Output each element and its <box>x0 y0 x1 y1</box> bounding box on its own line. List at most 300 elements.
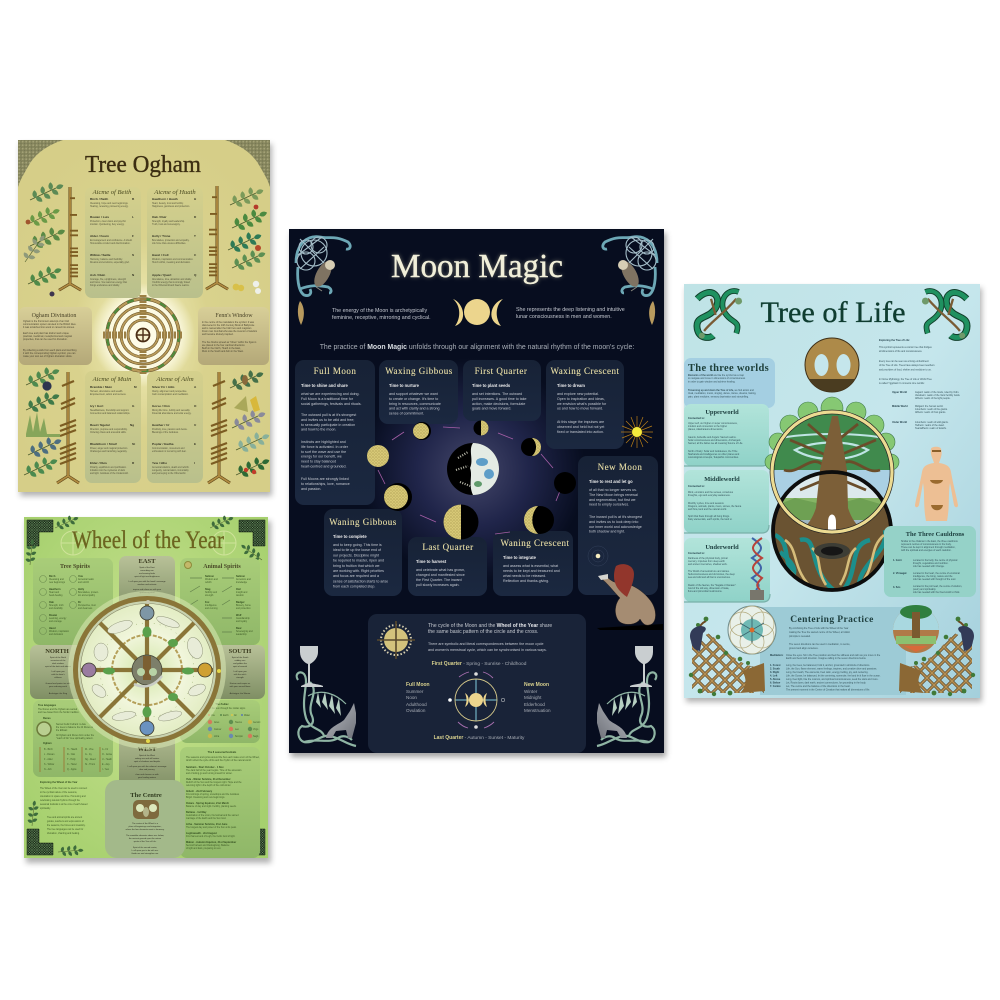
panel: Underworld: memory, impulses from deep earth <box>688 560 725 563</box>
panel: Underworld: and ancient memories, shadow work. <box>688 563 728 566</box>
panel: Animal Spirits: Ancestors and <box>236 578 251 581</box>
poster: Wheel of the Year <box>19 515 271 863</box>
lower disc roots <box>774 506 889 588</box>
panel: Last Quarter <box>408 537 487 596</box>
text: exploring Tree of Life: and providers of food, shelter and medicine to us. <box>879 368 932 371</box>
panel: Aicme of Huath: Boundaries, protection and empathy. <box>152 239 190 242</box>
panel: Waxing Gibbous: to create or change. It's time to <box>389 397 438 401</box>
icon: new moon star <box>588 546 608 566</box>
panel: The Zodiac: The cycle of the Sun through the zodiac signs <box>199 707 246 710</box>
icon: celtic tree and raven right <box>878 615 992 709</box>
label: new moon: Midnight <box>524 695 542 700</box>
panel: Last Quarter: Last Quarter <box>422 542 474 552</box>
text: intro left <box>332 308 431 321</box>
panel: Tree Languages: B - Birch <box>44 748 54 751</box>
panel: Underworld: Subconsciousness and old stories, the deep <box>688 573 735 576</box>
panel: Aicme of Huath: Apple / Quert <box>152 273 171 277</box>
panel: Waxing Gibbous: and support whatever we want <box>389 392 438 396</box>
panel: Fenn's Window: Beith in the North, Huath in the East, <box>202 347 241 350</box>
panel: Ogham Divination: By collecting a stick from each plant and inscribing <box>23 349 77 352</box>
panel: Centering Practice: 4. Left <box>770 674 778 678</box>
panel: Centering Practice: 7. Centre <box>770 685 781 688</box>
text: intro right: She represents the deep listening and intuitive <box>516 307 625 313</box>
panel: Tree Languages: and tree-based from the Nordic tradition. <box>38 711 80 714</box>
panel: Waning Gibbous: sense of satisfaction starts to arise <box>333 579 388 583</box>
title: Tree Ogham <box>85 152 201 178</box>
panel: Aicme of Muin: Power, anger and magical protection. <box>90 447 128 450</box>
panel: First Quarter: pull increases. A good time to take <box>472 397 527 401</box>
panel: New Moon: need to empty ourselves. <box>589 503 629 507</box>
panel: Aicme of Muin: M <box>134 385 137 389</box>
panel: The Centre <box>105 780 185 858</box>
panel: Tree Languages <box>33 700 113 777</box>
panel: 8 seasonal festivals: The dark half of the year begins. Time of the ancestors <box>186 769 242 772</box>
text: Exploring the Wheel of the Year: orientation in space and time. Honouring and <box>40 795 86 798</box>
panel: Aicme of Muin: Reed / Ngetal <box>90 423 110 427</box>
panel: Animal Spirits: leadership <box>236 633 247 636</box>
panel: Middleworld: Spirit that flows through all living things. <box>688 515 730 518</box>
panel: Tree Languages: Tree languages <box>38 704 57 707</box>
panel: Tree Spirits: Strength, truth <box>49 604 64 607</box>
panel: Tree Spirits: and durability <box>49 607 64 610</box>
text: Exploring the Wheel of the Year: guides, teachers and expressions of <box>47 820 84 823</box>
panel: Underworld: sea and wild and all that is unconscious. <box>688 576 731 579</box>
panel: 8 seasonal festivals: The longest day and power of the Sun at its peak. <box>186 826 237 829</box>
panel: North: dark wisdom <box>52 662 64 665</box>
waxing gibbous <box>413 422 431 440</box>
panel: Aicme of Beith: Protection, clear vision and psychic <box>90 220 127 223</box>
panel: South: Archetype: the Warrior <box>230 692 251 695</box>
panel: Tree Spirits: and courage <box>49 620 62 623</box>
panel: Aicme of Huath: T <box>194 234 196 238</box>
panel: South: with the oak's <box>234 673 246 676</box>
panel: Tree Spirits: Fir <box>78 601 81 604</box>
panel: Animal Spirits: Bravery, home <box>236 604 251 607</box>
panel: 8 seasonal festivals: Litha - Summer Solstice, 21st June <box>186 823 228 826</box>
panel: Animal Spirits: and protection <box>236 607 251 610</box>
panel: Animal Spirits: Badger <box>236 601 245 604</box>
panel: Aicme of Ailm: and journeying to the Otherworld. <box>152 472 186 475</box>
panel: Tree Languages: G - Ivy <box>85 754 93 756</box>
panel: The Three Cauldrons <box>884 526 976 597</box>
panel: 8 seasonal festivals: Samhain - Start October - 1 Nov <box>186 766 224 769</box>
panel: Waning Gibbous: Time to complete <box>333 534 367 539</box>
panel: Tree Languages: "reach of life" tree spirituality pattern. <box>56 737 94 740</box>
panel: 8 seasonal festivals: Mabon - Autumn Equinox, 21st September <box>186 841 236 844</box>
label: full moon: Noon <box>406 695 417 700</box>
panel: Aicme of Beith: Birch / Beith <box>90 197 108 201</box>
text: exploring Tree of Life: Under World <box>892 421 907 424</box>
chart: circle and cross <box>448 672 505 729</box>
panel: Tree Spirits: Heart and <box>49 591 60 594</box>
panel: Centering Practice <box>760 607 906 695</box>
panel: Waxing Crescent <box>546 360 624 449</box>
text: exploring Tree of Life: is called Yggdrasil. It connects nine worlds: <box>879 382 925 385</box>
panel: South: with your sacred flame <box>230 685 251 688</box>
panel: New Moon: our inner world and acknowledge <box>589 525 642 529</box>
icon: chalice and vines left <box>297 646 356 746</box>
corner owl and knot right <box>603 237 657 325</box>
panel: Tree Spirits: Perspective, trust <box>78 604 96 607</box>
title: Moon Magic <box>391 248 563 285</box>
panel: The Three Cauldrons: Life has needed with the fixed world to think. <box>913 591 960 594</box>
panel: moon and wheel correspondences: There are symbolic and literal correspondences between the moon cycle <box>428 642 543 646</box>
panel: First Quarter: action, make decisions, formulate <box>472 402 525 406</box>
gold ring <box>772 412 892 532</box>
panel: Centering Practice: principle is revealed. <box>789 635 811 638</box>
panel: Full Moon: energy for our benefit, we <box>301 455 342 459</box>
panel: Animal Spirits: wisdom <box>236 595 244 597</box>
panel: East: spirit of light and brightness <box>134 575 160 578</box>
panel: The Three Cauldrons: Life has needed with thought of the soul. <box>913 578 956 581</box>
panel: Ogham Divination: make your own set of Ogham divination sticks. <box>23 355 73 358</box>
panel: The Zodiac: Leo <box>235 729 240 731</box>
panel: Aicme of Ailm: A <box>194 385 197 389</box>
panel: West: setting sun and still waters <box>135 757 159 760</box>
panel: Aicme of Beith: Harmony, balance and flexibility. <box>90 258 123 261</box>
panel: Middleworld: Middleworld <box>704 476 740 483</box>
panel: Waning Crescent <box>493 531 573 596</box>
panel: The three worlds <box>684 358 775 408</box>
corner ornament left <box>18 140 63 187</box>
panel: Aicme of Ailm: Calm contemplation and meditation. <box>152 393 189 396</box>
panel: South: spirit of warmth <box>233 665 248 668</box>
panel: Animal Spirits: Wisdom and <box>205 579 218 581</box>
panel: Waning Gibbous: ideal to tie up the loose end of <box>333 548 381 552</box>
icon: dragon left <box>697 291 742 339</box>
panel: Aicme of Muin: Polarity, equilibrium and purification. <box>90 466 127 469</box>
panel: South: and golden fire <box>233 662 248 665</box>
label: full moon: Full Moon <box>406 682 430 688</box>
panel: Aicme of Huath: D <box>194 215 197 219</box>
panel: Animal Spirits: and cunning <box>205 608 218 610</box>
panel: Aicme of Beith: intuition. Quickening, fiery energy. <box>90 223 125 226</box>
panel: Full Moon: to surf the wave and use the <box>301 450 346 454</box>
panel: Tree Spirits: Holly <box>78 588 85 591</box>
panel: Upperworld: cosmological concepts, Telepathic communities. <box>688 456 739 459</box>
panel: The Three Cauldrons: intelligence, the living, nature and the <box>913 575 953 578</box>
panel: Aicme of Huath: H <box>194 197 197 201</box>
panel: Aicme of Ailm: Rising life force, fertility and sexuality. <box>152 409 191 412</box>
panel: West: WEST <box>138 746 157 753</box>
panel: Aicme of Huath: Happiness, goodness and protection. <box>152 205 190 208</box>
panel: East: awaken and activate <box>138 583 157 586</box>
icon: body with three cauldrons <box>915 447 958 521</box>
panel: Tree Languages: All Ogham and Runes form under the <box>56 734 95 737</box>
centre medallion <box>132 655 162 685</box>
text: Exploring the Wheel of the Year: divination, chanting and healing. <box>47 832 80 835</box>
panel: Full Moon: to relationships, love, romance <box>301 482 350 486</box>
panel: moon and wheel correspondences <box>368 614 586 753</box>
panel: Aicme of Huath: Strength, loyalty and leadership. <box>152 220 185 223</box>
panel: The Zodiac: Sagit. <box>253 735 259 738</box>
panel: moon and wheel correspondences: The cycle of the Moon and the Wheel of the Year share <box>428 623 552 629</box>
panel: Animal Spirits: Bear <box>236 627 242 630</box>
panel: Aicme of Beith: L <box>132 215 134 219</box>
panel: Tree Languages: D - Oak <box>67 754 76 756</box>
panel: Waning Gibbous: are working with. Right priorities <box>333 569 384 573</box>
panel: Animal Spirits: Animal Spirits <box>203 564 241 570</box>
panel: Aicme of Huath: Hazel / Coll <box>152 253 169 257</box>
panel: The three worlds: to navigate and move in dimensions of consciousness <box>688 377 746 380</box>
panel: The Three Cauldrons: with the spiritual and energies of each cauldron. <box>901 549 952 552</box>
panel: Waxing Crescent: and explore new potential. <box>557 392 599 396</box>
panel: The Three Cauldrons: thought, vegetables and nutrition. <box>913 562 949 565</box>
panel: Fenn's Window: and became divinely inspired. <box>202 333 234 336</box>
panel: Centering Practice: Long, Feel light, like the cosmos, and spiritual consciousness, seek the stars and more. <box>786 678 879 681</box>
panel: Tree Spirits: Hawthorn <box>49 588 61 591</box>
text: exploring Tree of Life: Asgard: realm of the Gods, ruled by Odin. <box>915 391 959 394</box>
icon: dragon right <box>922 291 967 339</box>
panel: The Three Cauldrons: Located in the belly, the centre of physical <box>913 559 958 562</box>
title: Tree of Life <box>760 296 906 329</box>
panel: Last Quarter: and celebrate what has grown, <box>416 568 465 572</box>
panel: Ogham Divination: Ogham Divination <box>32 313 76 319</box>
label: new moon: Winter <box>524 689 538 694</box>
panel: Aicme of Huath: Holly / Tinne <box>152 234 171 238</box>
panel: Tree Spirits: Hazel <box>49 627 56 630</box>
corner knots <box>19 515 265 862</box>
text: exploring Tree of Life: of the Tree of Life. Trees have always been teachers <box>879 364 935 367</box>
panel: 8 seasonal festivals: Celebration of the union, fire festival and the sacred <box>186 814 239 817</box>
earth centre <box>447 443 499 495</box>
panel: East <box>119 556 175 616</box>
panel: South: strength <box>236 676 245 679</box>
label: full moon: Ovulation <box>406 708 426 713</box>
panel: Tree Languages: M - Vine <box>85 749 94 751</box>
panel: Tree Languages: Q - Apple <box>67 768 77 771</box>
panel: Last Quarter: changed and manifested since <box>416 573 465 577</box>
last quarter <box>444 504 478 540</box>
panel: Waning Crescent: what needs to be released. <box>503 574 546 578</box>
icon: wolf right <box>597 703 627 738</box>
panel: The Centre: the ancient ground upon the nature <box>129 837 162 840</box>
panel: Tree Languages: I - Yew <box>102 769 109 771</box>
panel: The Three Cauldrons: 1. Goiri <box>893 559 902 562</box>
panel: Upperworld: Connected to: <box>688 417 705 420</box>
panel: Fenn's Window: and is named after the Irish hero and magician <box>202 327 252 330</box>
panel: West: Archetype: the Queen <box>137 783 158 786</box>
panel: Full Moon: need to stay balanced <box>301 460 336 464</box>
text: exploring Tree of Life: In Norse Mythology, the Tree of Life or World Tree <box>879 378 932 381</box>
icon: celtic tree and raven left <box>672 615 786 709</box>
panel: Centering Practice: making the Tree the sacred centre of the Wheel, a holistic <box>789 631 851 634</box>
panel: The Zodiac: Earth <box>223 714 229 717</box>
panel: Centering Practice: Life, the Ocean, be balanced, let the centering, surrender, feel and let it flow in the ocean. <box>786 674 881 678</box>
panel: Tree Languages: O - Gorse <box>102 753 113 756</box>
panel: Ogham Divination: practical, medicinal, metaphorical and magical <box>23 335 72 338</box>
panel: East: quickening wind <box>140 592 155 594</box>
label: new moon <box>524 682 551 713</box>
panel: Underworld: Realm of the faeries, the "Sagala or Danaan". <box>688 584 737 587</box>
panel: Ogham Divination: properties, that can be used for divination. <box>23 338 68 341</box>
panel: Animal Spirits: Insight and <box>236 591 248 594</box>
panel: Aicme of Ailm: E <box>194 442 196 446</box>
panel: Tree Languages: A - Fir <box>102 748 108 751</box>
text: Exploring the Wheel of the Year: Exploring the Wheel of the Year <box>40 781 77 784</box>
panel: Centering Practice: The present moment in the Centre of Creation that makes all dimensions of life. <box>786 688 870 692</box>
text: exploring Tree of Life: Jotunheim: realm of wild giants. <box>915 421 949 424</box>
chart: tree of life and roots <box>765 397 899 595</box>
panel: Aicme of Beith: F <box>132 234 134 238</box>
panel: Animal Spirits <box>180 558 260 645</box>
panel: Aicme of Ailm: Yew / Idho <box>152 461 167 465</box>
icon: plants top right <box>228 187 268 294</box>
panel: Centering Practice: Earth and bend with direction. Imagine calling in the seven directions below. <box>786 657 866 660</box>
panel: Full Moon: Time to shine and share <box>301 383 349 388</box>
panel: 8 seasonal festivals: Balance of day and night. Fertility, planting seeds. <box>186 805 237 808</box>
panel: Tree Spirits: Ancestral realm <box>78 578 94 581</box>
panel: Centering Practice: 2. South <box>770 668 780 670</box>
panel: The Zodiac: Scorpio <box>235 735 244 738</box>
panel: New Moon: both shadow and light. <box>589 530 625 534</box>
panel: Centering Practice: Close the eyes. Sit in the Tree position and feel the stillness and calm as you move in the <box>786 654 881 657</box>
chart: ogham wheel mandala <box>103 295 183 375</box>
panel: moon and wheel correspondences: the same basic pattern of the circle and the cross. <box>428 629 538 635</box>
panel: South <box>195 645 265 699</box>
panel: Middleworld: Fairy elementals, earth spirits, the land sí. <box>688 518 733 521</box>
panel: 8 seasonal festivals: Yule - Winter Solstice, 21st December <box>186 778 231 781</box>
new moon <box>554 472 576 494</box>
text: exploring Tree of Life: Every tree can be seen as a living embodiment <box>879 360 929 363</box>
panel: Aicme of Muin: Steadfastness, friendship and support. <box>90 409 130 412</box>
panel: The Three Cauldrons: Life has needed with Change. <box>913 565 945 568</box>
panel: Aicme of Huath: Q <box>194 273 197 277</box>
panel: Tree Languages: Ng - Reed <box>85 759 96 761</box>
panel: Aicme of Huath: Life force that ensures difficulties. <box>152 242 186 245</box>
icon: tree seal <box>805 338 859 392</box>
panel: Middleworld: thoughts, ego and everyday awareness. <box>688 494 731 497</box>
panel: Fenn's Window: The five blocks spread as "tribes" within the figure's <box>202 341 257 344</box>
panel: Aicme of Muin: Empowerment, action and success. <box>90 393 127 396</box>
panel: New Moon: The New Moon brings renewal <box>589 493 638 497</box>
label: full moon <box>406 682 430 713</box>
panel: West: clear and cleanse us with <box>135 773 160 776</box>
panel: The Zodiac: Aries <box>214 721 220 724</box>
panel: Centering Practice: 1. Forest <box>770 664 781 667</box>
panel: Fenn's Window <box>198 307 269 365</box>
icon: plants bottom right <box>230 370 270 478</box>
panel: Animal Spirits: Salmon <box>205 575 215 578</box>
panel: Tree Languages: F - Alder <box>44 758 53 761</box>
icon: ogham stave top right <box>206 186 228 289</box>
panel: North: Archetype: the King <box>49 692 68 695</box>
panel: Waning Crescent: needs to be kept and treasured and <box>503 569 560 573</box>
panel: Centering Practice: Centering Practice <box>790 615 874 625</box>
panel: South: I call upon you <box>233 671 248 673</box>
text: Exploring the Wheel of the Year: seasonal festivals is at the core of earth-based <box>40 803 88 806</box>
text: Exploring the Wheel of the Year: The Wheel of the Year can be used to connect <box>40 787 87 790</box>
panel: The Three Cauldrons: 3. Sós <box>893 586 901 589</box>
panel: Aicme of Muin: Blackthorn / Straif <box>90 442 118 446</box>
panel: Animal Spirits: Owl <box>236 588 241 591</box>
first quarter <box>474 420 489 436</box>
panel: Aicme of Ailm: U <box>194 423 197 427</box>
panel: The Three Cauldrons: represent centres of consciousness in the body. <box>901 543 952 546</box>
poster: Moon Magic <box>289 229 666 757</box>
panel: First Quarter: Time to plant seeds <box>472 383 511 388</box>
panel: Upperworld: intuition and connection to the higher <box>688 425 727 428</box>
waning gibbous <box>384 483 412 511</box>
panel: 8 seasonal festivals: Rebirth of the Sun and the longest night. Hope and the <box>186 781 242 784</box>
panel: The Centre: The mandala elements above are: below, <box>126 834 164 837</box>
panel: Aicme of Beith: Encouragement and confidence. A shield. <box>90 239 133 242</box>
full moon <box>367 445 389 467</box>
panel: Animal Spirits: Nobility and <box>205 591 218 594</box>
panel: North: Ground and protect us with <box>46 682 71 685</box>
panel: Middleworld: Monthly cycles, time and seasons <box>688 502 725 505</box>
panel: The Centre: The Centre <box>130 792 162 799</box>
panel: Aicme of Muin: R <box>132 461 135 465</box>
panel: 8 seasonal festivals: which reflect the cycle of life and the rhythm of the natural world. <box>186 759 252 762</box>
panel: Centering Practice: Meditation: <box>770 654 783 657</box>
panel: The Centre: Spirit of the sacred centre, <box>133 846 158 849</box>
label: full moon: Summer <box>406 689 424 694</box>
panel: Waxing Crescent: Time to dream <box>557 383 585 388</box>
icon: DNA helix <box>750 538 764 600</box>
text: exploring Tree of Life: This symbol represents a cosmic tree that bridges <box>879 346 933 349</box>
panel: Tree Spirits: Tree Spirits <box>60 564 91 570</box>
panel: Tree Spirits: heart-healing <box>49 594 63 597</box>
text: Exploring the Wheel of the Year: celebrating natural rhythms through the <box>40 799 81 802</box>
animal sketches <box>90 614 207 723</box>
panel: The Zodiac: Water <box>244 714 250 717</box>
text: exploring Tree of Life: Midgard: the human world. <box>915 405 944 408</box>
panel: Ogham Divination: Ogham is the first known attempt of an Irish <box>23 320 70 323</box>
arrows between phases <box>378 427 560 534</box>
panel: Animal Spirits: Fox <box>205 601 210 604</box>
panel: The Zodiac: Virgo <box>253 728 259 731</box>
panel: Aicme of Beith: Ash / Nuin <box>90 273 105 277</box>
panel: Waxing Gibbous <box>379 360 458 424</box>
panel: Tree Languages: T - Holly <box>67 759 76 761</box>
panel: 8 seasonal festivals: First stirrings of spring, snowdrops and the Goddess <box>186 793 240 796</box>
panel: Full Moon: Full Moons are strongly linked <box>301 477 349 481</box>
panel: Aicme of Huath: Hawthorn / Huath <box>152 197 178 201</box>
panel: 8 seasonal festivals: Second harvest and thanksgiving. Balance <box>186 844 230 847</box>
panel: The Zodiac: The Zodiac <box>215 703 229 706</box>
panel: Aicme of Muin: Direction, purpose and responsibility. <box>90 428 128 431</box>
panel: Ogham Divination: it with the corresponding Ogham symbol, you can <box>23 352 76 355</box>
panel: 8 seasonal festivals: returning light in the depth of the cold winter. <box>186 784 231 787</box>
panel: Animal Spirits: and loyalty <box>236 620 248 623</box>
panel: Waning Gibbous: be required to master, ripen and <box>333 559 384 563</box>
panel: Aicme of Huath: Youthful energy that is strongly linked <box>152 281 191 284</box>
panel: Ogham Divination: It was scratched into wood or carved into stones. <box>23 326 75 329</box>
panel: 8 seasonal festivals <box>180 747 260 858</box>
panel: The Centre: I call upon you to be with me. <box>132 849 159 852</box>
panel: Aicme of Beith: Rowan / Luis <box>90 215 109 219</box>
panel: Aicme of Huath: Hunch within, meaning and divination. <box>152 261 191 264</box>
panel: Waning Gibbous: and focus are required and a <box>333 574 379 578</box>
panel: Aicme of Ailm: enthusiasm in tremoring with fear. <box>152 450 187 453</box>
panel: Fenn's Window: Muin in the South and Ailm in the West. <box>202 350 244 353</box>
panel: Tree Languages: the Elhwaz. <box>56 729 68 732</box>
panel: West <box>119 724 175 790</box>
panel: Tree Languages: The Runes and the Ogham are sacred <box>38 708 78 711</box>
panel: Tree Spirits: Boundaries, protect- <box>78 591 99 594</box>
panel: Aicme of Ailm: Heather / Ur <box>152 423 170 427</box>
panel: Full Moon: and passion. <box>301 487 321 491</box>
panel: North: with the bear's <box>51 673 65 676</box>
panel: Aicme of Muin: Harvest, abundance and wealth. <box>90 390 123 393</box>
panel: Tree Languages: Sacred Celtic Futhark: to-fate <box>56 723 87 726</box>
panel: Full Moon: Full Moon is a traditional time for <box>301 397 354 401</box>
panel: East: and soaring birds <box>139 572 155 575</box>
panel: Full Moon: The outward pull is at it's strongest <box>301 413 356 417</box>
panel: Aicme of Muin: Ordering chaos and ancestral skills. <box>90 431 127 434</box>
panel: Aicme of Huath: to the Otherworld and Faerie realms. <box>152 284 190 287</box>
